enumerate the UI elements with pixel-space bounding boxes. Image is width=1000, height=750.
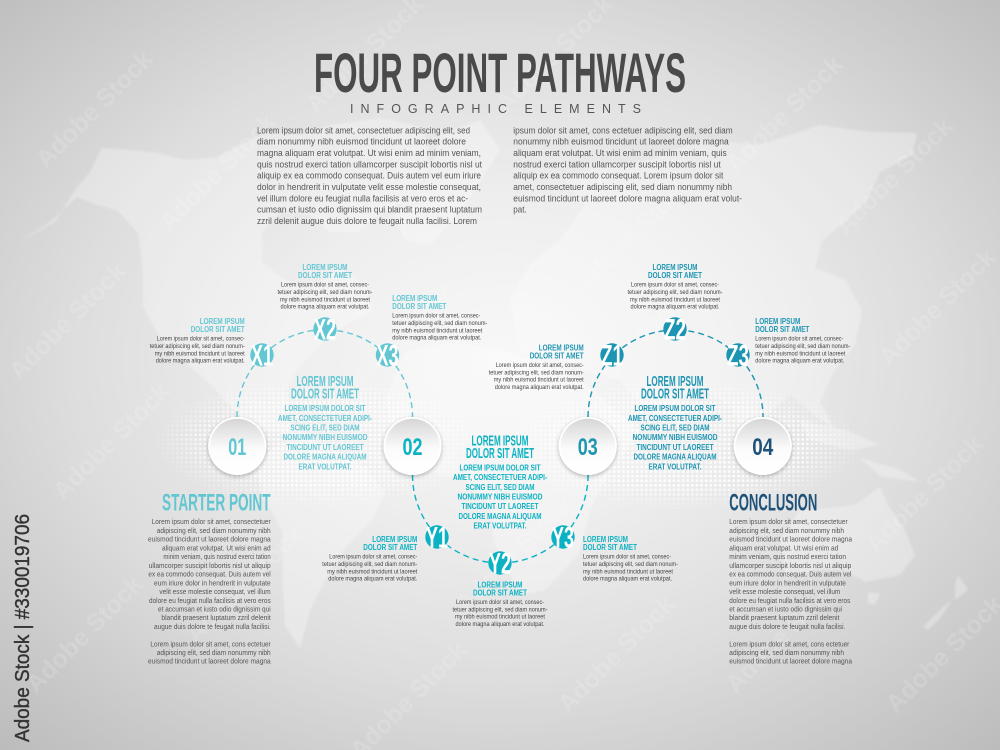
- center text block 2: DOLORE MAGNA ALIQUAM: [458, 512, 542, 521]
- label Y3: tetuer adipiscing elit, sed diam nonum-: [583, 561, 678, 568]
- starter point text: adipiscing elit, sed diam nonummy nibh: [157, 648, 271, 657]
- label X2: LOREM IPSUM: [302, 263, 348, 272]
- label X1: [150, 317, 245, 365]
- label X1: dolore magna aliquam erat volutpat.: [156, 358, 245, 365]
- starter point text: [148, 517, 271, 666]
- starter point text: Lorem ipsum dolor sit amet, cons ectetuer: [150, 639, 271, 648]
- conclusion text: augue duis dolore te feugait nulla facilisi.: [729, 622, 845, 631]
- node 03: [559, 417, 617, 475]
- center text block 2: AMET, CONSECTETUER ADIPI-: [453, 473, 547, 482]
- label Z1: [489, 343, 584, 391]
- intro text right: amet, consectetuer adipiscing elit, sed diam nonummy nibh: [513, 182, 732, 192]
- marker Y3: [551, 522, 575, 554]
- conclusion text: [729, 517, 853, 666]
- watermarks: Adobe Stock: [570, 280, 698, 408]
- label Y3: DOLOR SIT AMET: [583, 543, 637, 552]
- label Z1: DOLOR SIT AMET: [530, 351, 584, 360]
- watermarks: Adobe Stock: [330, 280, 458, 408]
- intro text right: [513, 125, 742, 215]
- label X3: tetuer adipiscing elit, sed diam nonum-: [392, 320, 487, 327]
- center text block 2: LOREM IPSUM: [472, 433, 528, 449]
- conclusion text: adipiscing elit, sed diam nonummy nibh: [729, 648, 844, 657]
- node 02: [384, 417, 442, 475]
- center text block 1: SCING ELIT, SED DIAM: [290, 424, 360, 432]
- watermarks: Adobe Stock: [720, 50, 848, 178]
- marker Y1: Y1: [426, 522, 448, 554]
- marker Z1: Z1: [601, 340, 623, 372]
- label Y1: LOREM IPSUM: [372, 535, 418, 544]
- label Z2: [628, 263, 722, 311]
- intro text left: cumsan et iusto odio dignissim qui blandit praesent luptatum: [257, 205, 482, 215]
- watermarks: Adobe Stock: [570, 170, 698, 298]
- label Y2: dolore magna aliquam erat volutpat.: [456, 621, 545, 628]
- marker Y2: Y2: [489, 548, 511, 580]
- label X3: dolore magna aliquam erat volutpat.: [392, 335, 481, 342]
- label Z1: Lorem ipsum dolor sit amet, consec-: [496, 362, 584, 369]
- label Z1: tetuer adipiscing elit, sed diam nonum-: [489, 369, 584, 376]
- marker Y3: Y3: [552, 522, 574, 554]
- center text block 2: SCING ELIT, SED DIAM: [466, 483, 535, 492]
- center text block 3: LOREM IPSUM DOLOR SIT: [634, 404, 716, 413]
- intro text right: ipsum dolor sit amet, cons ectetuer adipiscing elit, sed diam: [513, 125, 733, 135]
- starter point text: adipiscing elit, sed diam nonummy nibh: [157, 526, 271, 535]
- node 03: 03: [578, 434, 598, 461]
- label X2: my nibh euismod tincidunt ut laoreet: [280, 296, 370, 303]
- center text block 2: ERAT VOLUTPAT.: [474, 522, 526, 531]
- label Z2: tetuer adipiscing elit, sed diam nonum-: [628, 289, 722, 296]
- label Z2: DOLOR SIT AMET: [648, 271, 702, 280]
- conclusion text: adipiscing elit, sed diam nonummy nibh: [729, 526, 844, 535]
- node 02: 02: [402, 434, 422, 461]
- intro text left: magna aliquam erat volutpat. Ut wisi enim ad minim veniam,: [257, 148, 481, 158]
- dashed arc: 01 to 02: [237, 330, 412, 417]
- starter point text: velit esse molestie consequat, vel illum: [159, 587, 271, 596]
- world map: [17, 118, 968, 648]
- intro text right: pat.: [513, 205, 527, 215]
- starter point heading: STARTER POINT: [162, 490, 271, 517]
- label Y1: [322, 535, 418, 583]
- label Z3: LOREM IPSUM: [755, 317, 801, 326]
- starter point text: augue duis dolore te feugait nulla facilisi.: [154, 622, 271, 631]
- conclusion text: blandit praesent luptatum zzril delenit: [729, 613, 840, 622]
- conclusion text: ex ea commodo consequat. Duis autem vel: [729, 570, 852, 579]
- starter point text: Lorem ipsum dolor sit amet, consectetuer: [152, 517, 271, 526]
- label X1: DOLOR SIT AMET: [191, 325, 245, 334]
- watermarks: Adobe Stock: [20, 570, 148, 698]
- marker Y1: [425, 522, 449, 554]
- label Z1: LOREM IPSUM: [539, 343, 584, 352]
- node 01: [208, 417, 266, 475]
- intro text right: euismod tincidunt ut laoreet dolore magna aliquam erat volut-: [513, 193, 742, 203]
- label X2: tetuer adipiscing elit, sed diam nonum-: [278, 289, 372, 296]
- label X3: DOLOR SIT AMET: [392, 302, 446, 311]
- watermarks: Adobe Stock: [30, 45, 158, 173]
- center text block 1: LOREM IPSUM: [296, 374, 354, 390]
- starter point text: et accumsan et iusto odio dignissim qui: [158, 604, 271, 614]
- marker Z3: [726, 340, 750, 372]
- label Z3: my nibh euismod tincidunt ut laoreet: [755, 350, 845, 357]
- label Y2: my nibh euismod tincidunt ut laoreet: [455, 614, 545, 621]
- intro text left: Lorem ipsum dolor sit amet, consectetuer adipiscing elit, sed: [257, 125, 470, 135]
- watermarks: Adobe Stock: [3, 257, 131, 385]
- center text block 3: DOLOR SIT AMET: [641, 387, 709, 403]
- label Z3: dolore magna aliquam erat volutpat.: [755, 358, 844, 365]
- label Z2: my nibh euismod tincidunt ut laoreet: [630, 296, 720, 303]
- center text block 3: NONUMMY NIBH EUISMOD: [632, 433, 718, 442]
- center text block 1: NONUMMY NIBH EUISMOD: [282, 433, 368, 442]
- subtitle: INFOGRAPHIC ELEMENTS: [350, 102, 641, 116]
- marker X2: X2: [314, 314, 336, 346]
- label Z3: tetuer adipiscing elit, sed diam nonum-: [755, 343, 850, 350]
- label Y3: dolore magna aliquam erat volutpat.: [583, 576, 672, 583]
- side credit: Adobe Stock | #330019706: [12, 514, 34, 742]
- label Z3: DOLOR SIT AMET: [755, 325, 809, 334]
- center text block 1: [278, 374, 372, 471]
- label Z2: Lorem ipsum dolor sit amet, consec-: [631, 282, 719, 289]
- watermarks: Adobe Stock: [552, 590, 680, 718]
- watermarks: Adobe Stock: [830, 112, 958, 240]
- watermarks: Adobe Stock: [450, 490, 578, 618]
- intro text right: nostrud exerci tation ullamcorper suscipit lobortis nisl ut: [513, 159, 721, 169]
- conclusion text: ullamcorper suscipit lobortis nisl ut aliquip: [729, 561, 851, 570]
- label Y1: tetuer adipiscing elit, sed diam nonum-: [322, 561, 417, 568]
- marker X2: [313, 314, 337, 346]
- starter point text: minim veniam, quis nostrud exerci tation: [163, 552, 271, 561]
- label Z3: [755, 317, 850, 365]
- label Z1: my nibh euismod tincidunt ut laoreet: [494, 377, 584, 384]
- marker Z3: Z3: [727, 340, 749, 372]
- label Y3: Lorem ipsum dolor sit amet, consec-: [583, 554, 671, 561]
- center text block 1: TINCIDUNT UT LAOREET: [286, 443, 364, 452]
- label X1: Lorem ipsum dolor sit amet, consec-: [157, 336, 245, 343]
- label Y1: Lorem ipsum dolor sit amet, consec-: [329, 554, 417, 561]
- conclusion heading: CONCLUSION: [729, 490, 817, 517]
- label X2: [278, 263, 372, 311]
- label Y2: Lorem ipsum dolor sit amet, consec-: [456, 599, 544, 606]
- intro text right: nonummy nibh euismod tincidunt ut laoreet dolore magna: [513, 137, 729, 147]
- center text block 3: ERAT VOLUTPAT.: [648, 462, 702, 471]
- center text block 1: DOLORE MAGNA ALIQUAM: [284, 453, 367, 462]
- center text block 1: DOLOR SIT AMET: [291, 387, 359, 403]
- conclusion text: aliquam erat volutpat. Ut wisi enim ad: [729, 543, 838, 552]
- starter point text: blandit praesent luptatum zzril delenit: [161, 613, 271, 622]
- center text block 3: SCING ELIT, SED DIAM: [640, 424, 710, 432]
- label X1: my nibh euismod tincidunt ut laoreet: [155, 350, 245, 357]
- intro text left: vel illum dolore eu feugiat nulla facilisis at vero eros et ac-: [257, 193, 468, 203]
- label Z2: LOREM IPSUM: [652, 263, 698, 272]
- label Z1: dolore magna aliquam erat volutpat.: [495, 384, 584, 391]
- label Y2: DOLOR SIT AMET: [473, 588, 527, 597]
- marker Y2: [488, 548, 512, 580]
- center text block 1: AMET, CONSECTETUER ADIPI-: [278, 414, 372, 423]
- intro text left: dolor in hendrerit in vulputate velit esse molestie consequat,: [257, 182, 481, 192]
- watermarks: Adobe Stock: [47, 377, 175, 505]
- intro text left: diam nonummy nibh euismod tincidunt ut laoreet dolore: [257, 137, 466, 147]
- starter point text: ullamcorper suscipit lobortis nisl ut aliquip: [149, 561, 271, 570]
- marker X3: X3: [376, 340, 398, 372]
- intro text left: [257, 125, 482, 226]
- starter point text: euismod tincidunt ut laoreet dolore magna: [148, 535, 271, 544]
- label X1: tetuer adipiscing elit, sed diam nonum-: [150, 343, 245, 350]
- marker Z2: [663, 314, 687, 346]
- node 04: 04: [752, 434, 774, 461]
- center text block 2: [453, 433, 547, 531]
- label Y2: tetuer adipiscing elit, sed diam nonum-: [452, 606, 548, 613]
- halftone dot band: [176, 392, 840, 499]
- center text block 2: NONUMMY NIBH EUISMOD: [458, 492, 543, 502]
- marker Z2: Z2: [664, 314, 686, 346]
- label Y2: LOREM IPSUM: [478, 580, 523, 589]
- center text block 3: AMET, CONSECTETUER ADIPI-: [628, 414, 722, 423]
- starter point text: dolore eu feugiat nulla facilisis at vero eros: [149, 596, 271, 605]
- watermarks: Adobe Stock: [860, 430, 988, 558]
- dashed arc: 03 to 04: [588, 330, 763, 417]
- marker X1: [250, 340, 274, 372]
- center text block 1: LOREM IPSUM DOLOR SIT: [284, 404, 366, 413]
- intro text left: zzril delenit augue duis dolore te feugait nulla facilisi. Lorem: [257, 216, 477, 226]
- center text block 3: DOLORE MAGNA ALIQUAM: [634, 453, 717, 462]
- center text block 2: LOREM IPSUM DOLOR SIT: [460, 463, 540, 472]
- center text block 3: LOREM IPSUM: [646, 374, 704, 390]
- label X2: DOLOR SIT AMET: [298, 271, 352, 280]
- label X2: Lorem ipsum dolor sit amet, consec-: [281, 282, 369, 289]
- label X3: [392, 294, 487, 342]
- conclusion text: euismod tincidunt ut laoreet dolore magna: [729, 657, 853, 666]
- watermarks: Adobe Stock: [180, 520, 308, 648]
- watermarks: Adobe Stock: [720, 570, 848, 698]
- starter point text: aliquam erat volutpat. Ut wisi enim ad: [162, 543, 271, 552]
- node 04: [734, 417, 792, 475]
- conclusion text: euismod tincidunt ut laoreet dolore magna: [729, 535, 853, 544]
- intro text right: aliquam erat volutpat. Ut wisi enim ad minim veniam, quis: [513, 148, 727, 158]
- center text block 3: [628, 374, 722, 471]
- dashed arc: 02 to 03: [412, 475, 588, 563]
- label Z3: Lorem ipsum dolor sit amet, consec-: [755, 336, 843, 343]
- watermarks: Adobe Stock: [873, 243, 1000, 371]
- conclusion text: Lorem ipsum dolor sit amet, consectetuer: [729, 517, 848, 526]
- label Y3: my nibh euismod tincidunt ut laoreet: [583, 568, 673, 575]
- center text block 3: TINCIDUNT UT LAOREET: [636, 443, 714, 452]
- label Z2: dolore magna aliquam erat volutpat.: [630, 304, 720, 311]
- label Y3: [583, 535, 678, 583]
- center text block 1: ERAT VOLUTPAT.: [298, 462, 352, 471]
- conclusion text: dolore eu feugiat nulla facilisis at vero eros: [729, 596, 850, 605]
- label Y1: my nibh euismod tincidunt ut laoreet: [327, 568, 417, 575]
- conclusion text: velit esse molestie consequat, vel illum: [729, 587, 840, 596]
- starter point text: euismod tincidunt ut laoreet dolore magna: [148, 657, 271, 666]
- intro text left: aliquip ex ea commodo consequat. Duis autem vel eum iriure: [257, 171, 481, 181]
- label X3: LOREM IPSUM: [392, 294, 438, 303]
- label Y1: DOLOR SIT AMET: [363, 543, 417, 552]
- label X3: Lorem ipsum dolor sit amet, consec-: [392, 313, 480, 320]
- label Y2: [452, 580, 548, 628]
- label X3: my nibh euismod tincidunt ut laoreet: [392, 327, 482, 334]
- marker X3: [376, 340, 399, 372]
- watermarks: Adobe Stock: [153, 108, 281, 236]
- label X2: dolore magna aliquam erat volutpat.: [280, 304, 370, 311]
- title: FOUR POINT PATHWAYS: [314, 41, 686, 104]
- conclusion text: Lorem ipsum dolor sit amet, cons ectetuer: [729, 639, 850, 648]
- label Y3: LOREM IPSUM: [583, 535, 628, 544]
- center text block 2: TINCIDUNT UT LAOREET: [462, 502, 538, 511]
- marker X1: X1: [251, 340, 273, 372]
- label X1: LOREM IPSUM: [200, 317, 245, 326]
- conclusion text: et accumsan et iusto odio dignissim qui: [729, 604, 842, 614]
- node 01: 01: [228, 434, 246, 461]
- starter point text: eum iriure dolor in hendrerit in vulputate: [154, 578, 271, 587]
- conclusion text: minim veniam, quis nostrud exerci tation: [729, 552, 846, 561]
- intro text right: aliquip ex ea commodo consequat. Lorem ipsum dolor sit: [513, 171, 724, 181]
- conclusion text: eum iriure dolor in hendrerit in vulputate: [729, 578, 846, 587]
- label Y1: dolore magna aliquam erat volutpat.: [328, 576, 417, 583]
- marker Z1: [600, 340, 624, 372]
- starter point text: ex ea commodo consequat. Duis autem vel: [148, 570, 271, 579]
- intro text left: quis nostrud exerci tation ullamcorper suscipit lobortis nisl ut: [257, 159, 482, 169]
- center text block 2: DOLOR SIT AMET: [466, 446, 534, 462]
